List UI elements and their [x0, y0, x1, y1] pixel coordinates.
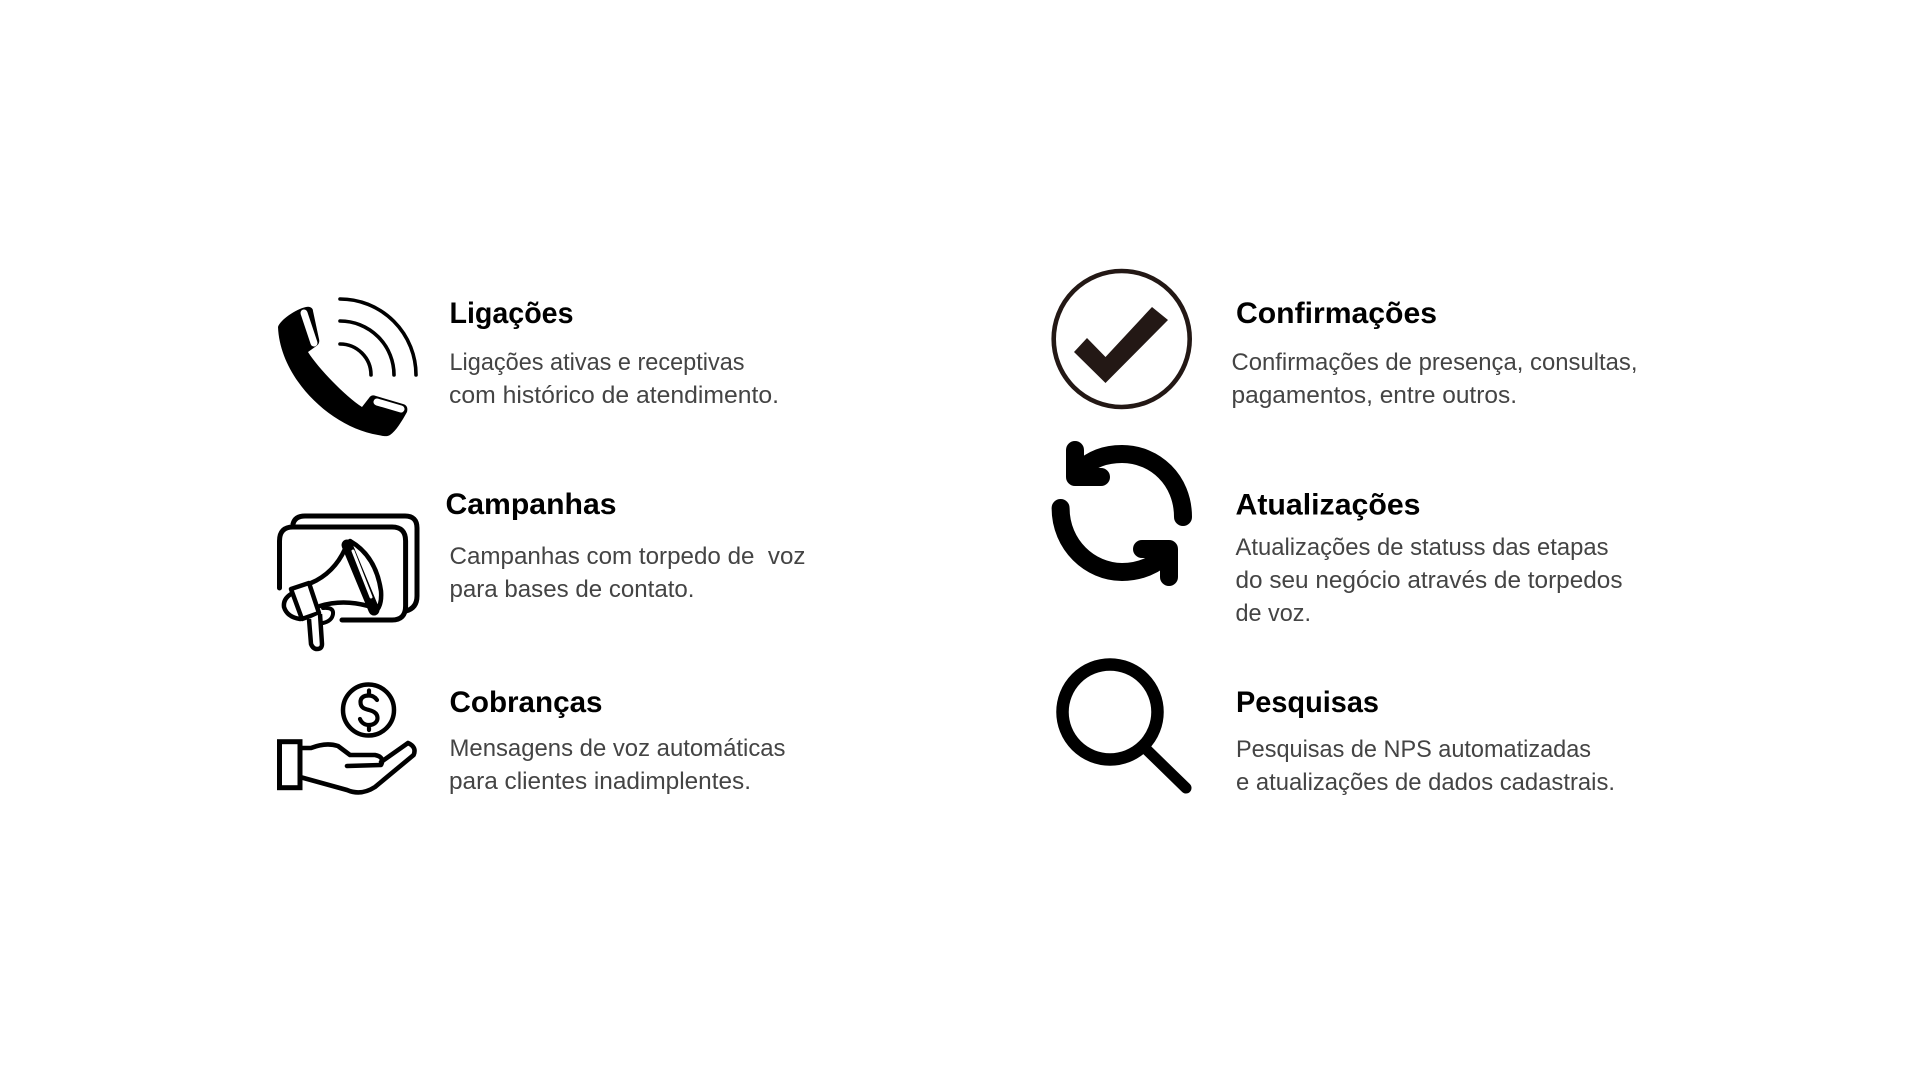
heading: Confirmações: Confirmações	[1236, 297, 1437, 330]
text block: Campanhas description: para bases de contato.	[450, 576, 694, 603]
text block: Cobranças description	[449, 735, 786, 795]
panel: Atualizações	[1061, 450, 1622, 627]
text block: Pesquisas description: e atualizações de dados cadastrais.	[1236, 769, 1615, 796]
text block: Atualizações description	[1236, 534, 1622, 627]
icon: circular refresh arrows	[1061, 450, 1183, 577]
text block: Cobranças description: Mensagens de voz automáticas	[450, 735, 786, 762]
panel: Pesquisas	[1062, 664, 1615, 796]
heading: Atualizações: Atualizações	[1236, 488, 1420, 522]
text block: Campanhas description: Campanhas com torpedo de voz	[450, 543, 806, 570]
icon: megaphone over message cards	[280, 516, 417, 649]
text block: Pesquisas description	[1236, 736, 1615, 796]
icon: magnifying glass	[1062, 664, 1186, 788]
text block: Cobranças description: para clientes inadimplentes.	[449, 768, 751, 795]
text block: Atualizações description: Atualizações de statuss das etapas	[1236, 534, 1608, 561]
heading: Campanhas: Campanhas	[446, 488, 616, 521]
text block: Campanhas description	[450, 543, 806, 603]
panel: Confirmações	[1054, 271, 1638, 409]
text block: Ligações description: Ligações ativas e receptivas	[450, 349, 744, 376]
icon: telephone with signal waves	[278, 299, 416, 436]
heading: Pesquisas: Pesquisas	[1236, 686, 1379, 719]
text block: Confirmações description: pagamentos, entre outros.	[1232, 382, 1517, 409]
panel: Campanhas	[280, 488, 806, 649]
heading: Ligações: Ligações	[450, 297, 574, 330]
panel: Cobranças	[280, 684, 786, 795]
text block: Confirmações description	[1232, 349, 1638, 409]
panel: Ligações	[278, 297, 779, 436]
text block: Pesquisas description: Pesquisas de NPS automatizadas	[1236, 736, 1591, 763]
text block: Atualizações description: de voz.	[1236, 600, 1311, 627]
icon: hand holding coin	[280, 684, 415, 792]
text block: Ligações description	[449, 349, 779, 409]
text block: Ligações description: com histórico de atendimento.	[449, 382, 779, 409]
icon: check mark in circle	[1054, 271, 1190, 407]
text block: Atualizações description: do seu negócio através de torpedos	[1236, 567, 1622, 594]
heading: Cobranças: Cobranças	[450, 686, 602, 719]
text block: Confirmações description: Confirmações de presença, consultas,	[1232, 349, 1638, 376]
